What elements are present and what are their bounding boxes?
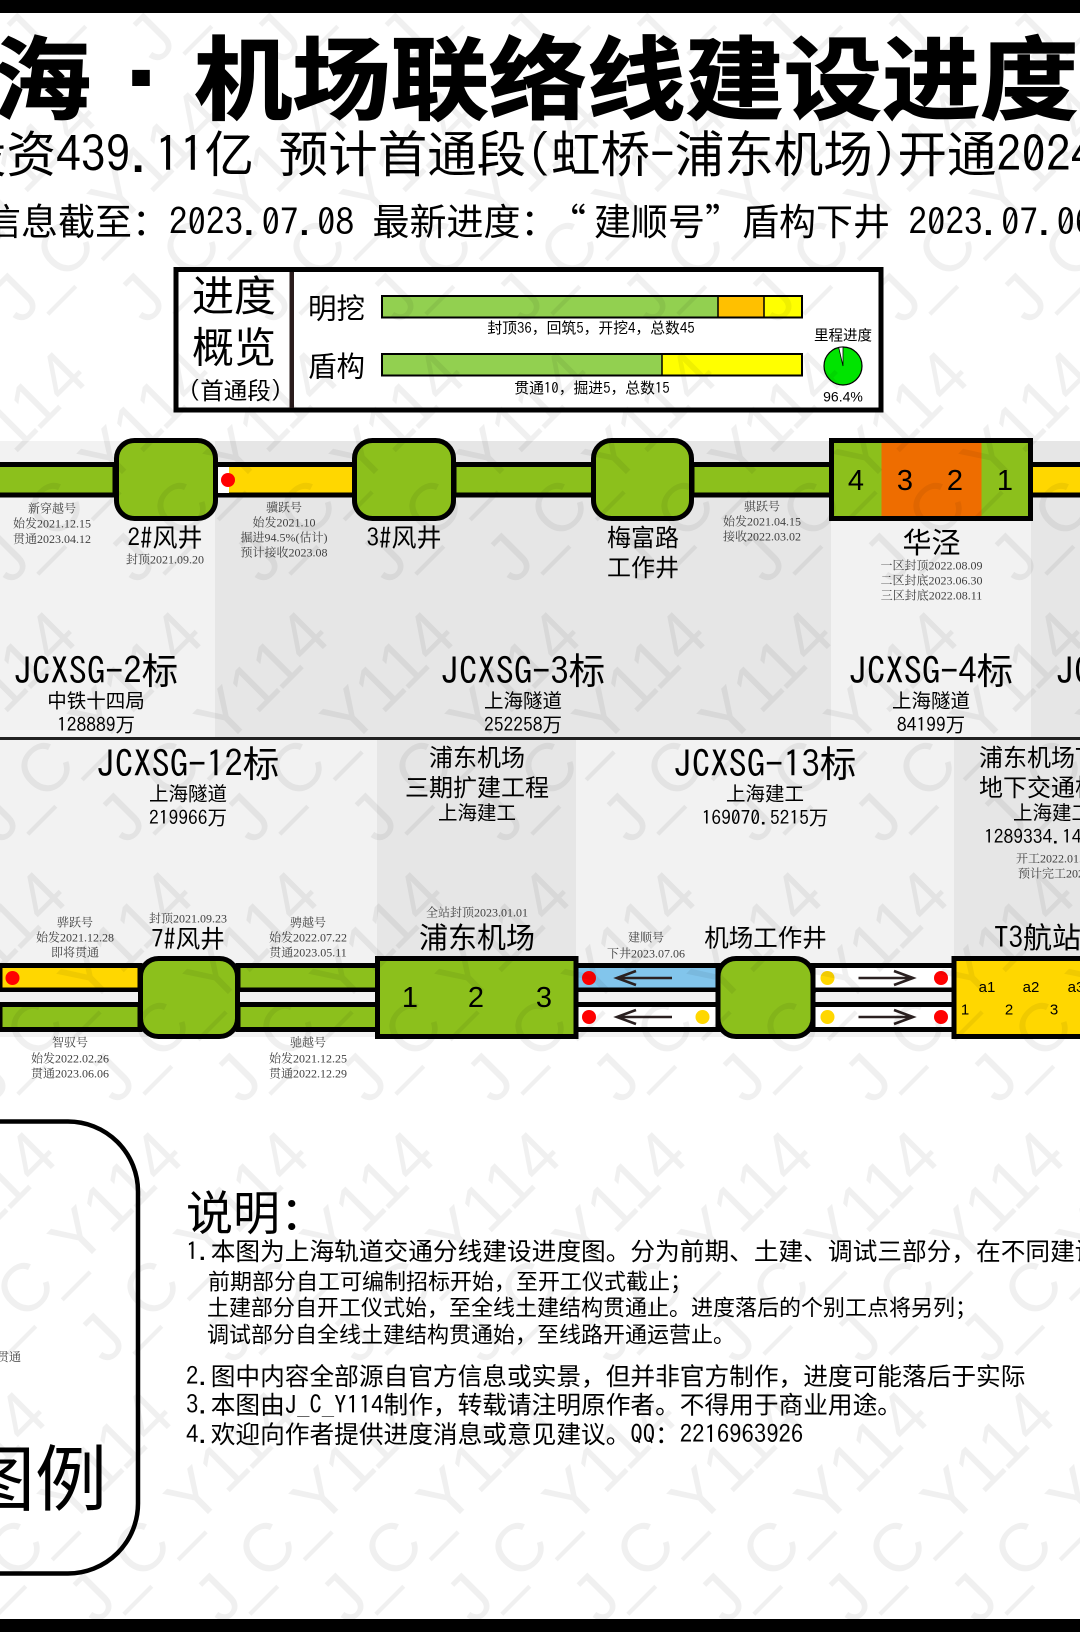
label: airport work shaft: 机场工作井 — [704, 920, 827, 954]
label: 3# shaft: 3#风井 — [366, 518, 442, 554]
label: Chengyue shield: 骋越号 — [290, 914, 326, 930]
contract: JCXSG-3 — [441, 642, 605, 738]
lower track: airport shaft to T3 — [813, 966, 955, 1030]
mileage progress pie: 里程进度 — [814, 324, 872, 346]
text: J_C_Y114 — [733, 76, 993, 337]
label: Huayue shield: 骅跃号 — [57, 914, 93, 930]
label: Meifu Road work shaft — [607, 518, 679, 583]
label: Zhiyu shield: 贯通2023.06.06 — [31, 1066, 109, 1080]
text: J_C_Y114 — [461, 596, 721, 857]
Meifu Road work shaft box — [594, 440, 692, 518]
text: J_C_Y114 — [451, 856, 711, 1117]
section separator line — [0, 737, 1080, 740]
text: J_C_Y114 — [713, 596, 973, 857]
overview heading — [188, 263, 282, 406]
Pudong airport station box: 2 — [468, 982, 484, 1014]
overview heading: 进度 — [192, 263, 276, 324]
text: J_C_Y114 — [209, 596, 469, 857]
label: Huajing station: 一区封顶2022.08.09 — [880, 558, 983, 572]
text: J_C_Y114 — [567, 1116, 827, 1377]
arrow: upper tunnel eastward — [858, 971, 913, 985]
top border bar — [0, 0, 1080, 13]
contract: JCXSG-2 — [14, 642, 178, 738]
shield progress bar — [308, 344, 802, 398]
info line: latest progress: 信息截至：2023.07.08 最新进度： “建顺号”盾构下井 2023.07.06 — [0, 192, 1080, 246]
arrow: lower tunnel eastward — [858, 1010, 913, 1024]
2# ventilation shaft box — [116, 440, 216, 518]
label: Huayue shield: 始发2021.12.28 — [36, 930, 114, 944]
lower track: west of 7# shaft — [0, 966, 140, 1030]
label: Chiyue shield — [269, 1034, 347, 1080]
shield progress bar: 贯通10，掘进5，总数15 — [514, 377, 670, 398]
Huajing station box: 4 — [848, 465, 864, 497]
contract: JCXSG-12: JCXSG-12标 — [97, 735, 279, 788]
text: J_C_Y114 — [355, 76, 615, 337]
overview heading: (首通段) — [188, 372, 282, 406]
contract: Pudong airport phase 3 — [405, 738, 549, 826]
upper contract-section bands — [0, 441, 1080, 737]
label: Meifu Road work shaft: 梅富路 — [607, 518, 679, 553]
note 3: 3.本图由J_C_Y114制作，转载请注明原作者。不得用于商业用途。 — [186, 1386, 902, 1422]
text: J_C_Y114 — [229, 76, 489, 337]
contract: Pudong airport underground hub — [979, 738, 1080, 880]
notes block — [186, 1175, 1080, 1451]
Huajing station box: 1 — [997, 465, 1013, 497]
label: Jiyue shield: 骥跃号 — [266, 500, 302, 514]
text: J_C_Y114 — [481, 76, 741, 337]
text: J_C_Y114 — [557, 1376, 817, 1632]
text: J_C_Y114 — [345, 336, 605, 597]
label: Jiyue shield: 掘进94.5%(估计) — [240, 530, 328, 544]
label: Pudong airport station: 全站封顶2023.01.01 — [426, 904, 528, 920]
label: Meifu Road work shaft: 工作井 — [607, 548, 679, 583]
3# ventilation shaft box — [354, 440, 454, 518]
label: Zhiyu shield: 始发2022.02.26 — [31, 1050, 109, 1066]
label: Chiyue shield: 始发2021.12.25 — [269, 1050, 347, 1066]
text: J_C_Y114 — [587, 596, 847, 857]
label: Huayue shield: 即将贯通 — [51, 944, 99, 960]
label: Huajing station: 华泾 — [902, 520, 961, 562]
contract: JCXSG-12: 上海隧道 — [149, 778, 227, 806]
label: Xinchuanyue shield: 新穿越号 — [28, 500, 76, 516]
label: 7# shaft: 7#风井 — [151, 920, 225, 956]
text: J_C_Y114 — [819, 1116, 1079, 1377]
T3 station box: 1 — [961, 1002, 969, 1018]
label: Huayue shield — [36, 914, 114, 960]
contract: JCXSG-12 — [97, 735, 279, 830]
label: Zhiyu shield — [31, 1036, 109, 1080]
text: J_C_Y114 — [335, 596, 595, 857]
T3 station box: 3 — [1050, 1002, 1058, 1018]
text: J_C_Y114 — [83, 596, 343, 857]
title: 机场联络线建设进度 — [194, 8, 1079, 139]
note 1 detail: preliminary: 前期部分自工可编制招标开始，至开工仪式截止； — [208, 1264, 692, 1296]
label: Xinchuanyue shield — [13, 500, 91, 546]
label: 7# shaft: 封顶2021.09.23 — [149, 910, 227, 926]
shield progress bar: 盾构 — [308, 344, 365, 386]
text: J_C_Y114 — [441, 1116, 701, 1377]
airport work shaft box — [718, 958, 813, 1036]
contract: JCXSG-3: 252258万 — [484, 708, 562, 738]
T3 station box: a2 — [1023, 979, 1039, 996]
label: 2# shaft: 封顶2021.09.20 — [126, 552, 204, 566]
shield position marker — [221, 473, 235, 487]
contract: JCXSG-4: JCXSG-4标 — [849, 642, 1013, 695]
contract: JCXSG-4: 84199万 — [897, 708, 965, 738]
open-cut progress bar — [308, 286, 802, 338]
text: J_C_Y114 — [431, 1376, 691, 1632]
text: J_C_Y114 — [179, 1376, 439, 1632]
text: J_C_Y114 — [199, 856, 459, 1117]
label: Pudong airport station: 浦东机场 — [419, 915, 535, 957]
label: Jianshun shield — [607, 930, 685, 960]
arrow: lower tunnel westward — [617, 1010, 672, 1024]
label: Jianshun shield: 下井2023.07.06 — [607, 946, 685, 960]
label: 2# shaft: 2#风井 — [127, 518, 203, 554]
arrow: upper tunnel westward — [617, 971, 672, 985]
label: Jiyue shield: 预计接收2023.08 — [240, 544, 328, 560]
note 2: 2.图中内容全部源自官方信息或实景，但并非官方制作，进度可能落后于实际 — [186, 1357, 1025, 1393]
T3 station box: a1 — [979, 979, 995, 996]
text: J_C_Y114 — [693, 1116, 953, 1377]
text: J_C_Y114 — [577, 856, 837, 1117]
contract: JCXSG-4 — [849, 642, 1013, 738]
text: J_C_Y114 — [63, 1116, 323, 1377]
label: Huajing station — [880, 520, 983, 602]
contract: Pudong airport phase 3: 上海建工 — [438, 796, 516, 826]
label: Huajing station: 三区封底2022.08.11 — [881, 588, 982, 602]
text: J_C_Y114 — [219, 336, 479, 597]
mileage progress pie — [814, 324, 872, 404]
label: Xinchuanyue shield: 始发2021.12.15 — [13, 516, 91, 530]
lower contract-section bands — [0, 740, 1080, 1037]
upper track line — [0, 464, 1080, 495]
contract: JCXSG-12: 219966万 — [149, 802, 227, 830]
notes heading: 说明： — [186, 1175, 327, 1244]
contract: JCXSG-13: 169070.5215万 — [702, 802, 828, 830]
label: Qiyue shield: 始发2021.04.15 — [723, 514, 801, 528]
label: Huajing station: 二区封底2023.06.30 — [880, 572, 983, 588]
bottom border bar — [0, 1619, 1080, 1632]
Huajing station box: 3 — [897, 465, 913, 497]
open-cut progress bar: 明挖 — [308, 286, 365, 328]
label: Chengyue shield: 贯通2023.05.11 — [269, 946, 347, 960]
contract: JCXSG-3: 上海隧道 — [484, 684, 562, 714]
Huajing station box: 2 — [947, 465, 963, 497]
label: Jiyue shield: 始发2021.10 — [252, 514, 316, 530]
contract: JCXSG-2: 中铁十四局 — [47, 684, 145, 714]
Pudong airport station box — [378, 958, 576, 1036]
label: Jianshun shield: 建顺号 — [628, 930, 664, 944]
text: J_C_Y114 — [93, 336, 353, 597]
T3 station box — [954, 958, 1080, 1036]
contract: Pudong airport phase 3: 浦东机场 — [429, 738, 525, 773]
label: Chiyue shield: 驰越号 — [290, 1034, 326, 1050]
contract: JCXSG-2: 128889万 — [57, 708, 135, 738]
note 1 detail: commissioning: 调试部分自全线土建结构贯通始，至线路开通运营止。 — [207, 1318, 735, 1350]
text: J_C_Y114 — [53, 1376, 313, 1632]
label: Qiyue shield — [723, 498, 801, 544]
7# shaft box — [140, 958, 238, 1036]
label: Chengyue shield: 始发2022.07.22 — [269, 930, 347, 944]
label: Chengyue shield — [269, 914, 347, 960]
contract: JCXSG-13: JCXSG-13标 — [674, 735, 856, 788]
label: Qiyue shield: 接收2022.03.02 — [723, 528, 801, 544]
contract: JCXSG-4: 上海隧道 — [892, 684, 970, 714]
text: J_C_Y114 — [809, 1376, 1069, 1632]
open-cut progress bar: 封顶36，回筑5，开挖4，总数45 — [487, 317, 695, 338]
text: J_C_Y114 — [723, 336, 983, 597]
text: J_C_Y114 — [703, 856, 963, 1117]
label: Chiyue shield: 贯通2022.12.29 — [269, 1066, 347, 1080]
text: J_C_Y114 — [471, 336, 731, 597]
divider — [290, 272, 294, 408]
panel: legend — [0, 1122, 138, 1574]
mileage progress pie: 96.4% — [823, 388, 863, 404]
contract: Pudong airport phase 3: 三期扩建工程 — [405, 768, 549, 803]
text: J_C_Y114 — [189, 1116, 449, 1377]
lower track: Pudong airport to airport shaft — [576, 966, 718, 1030]
contract: JCXSG-13: 上海建工 — [726, 778, 804, 806]
contract: JCXSG-13 — [674, 735, 856, 830]
text: J_C_Y114 — [315, 1116, 575, 1377]
label: Jiyue shield — [240, 500, 328, 560]
label: Qiyue shield: 骐跃号 — [744, 498, 780, 514]
title: · — [117, 33, 165, 123]
Pudong airport station box: 1 — [402, 982, 418, 1014]
label: Xinchuanyue shield: 贯通2023.04.12 — [13, 532, 91, 546]
panel: progress overview — [176, 263, 881, 410]
overview heading: 概览 — [192, 314, 276, 376]
text: J_C_Y114 — [73, 856, 333, 1117]
note 1 detail: civil works: 土建部分自开工仪式始，至全线土建结构贯通止。进度落后的个别工点将另列； — [207, 1290, 977, 1322]
text: J_C_Y114 — [683, 1376, 943, 1632]
lower track: 7# shaft to Pudong airport — [238, 966, 378, 1030]
text: J_C_Y114 — [103, 76, 363, 337]
text: J_C_Y114 — [607, 76, 867, 337]
Pudong airport station box: 3 — [536, 982, 552, 1014]
text: J_C_Y114 — [597, 336, 857, 597]
text: J_C_Y114 — [325, 856, 585, 1117]
Huajing station box — [832, 440, 1030, 518]
note 4: 4.欢迎向作者提供进度消息或意见建议。QQ：2216963926 — [186, 1415, 803, 1451]
text: J_C_Y114 — [305, 1376, 565, 1632]
contract: JCXSG-2: JCXSG-2标 — [14, 642, 178, 695]
T3 station box: 2 — [1005, 1002, 1013, 1018]
label: Zhiyu shield: 智驭号 — [52, 1036, 88, 1050]
contract: JCXSG-3: JCXSG-3标 — [441, 642, 605, 695]
